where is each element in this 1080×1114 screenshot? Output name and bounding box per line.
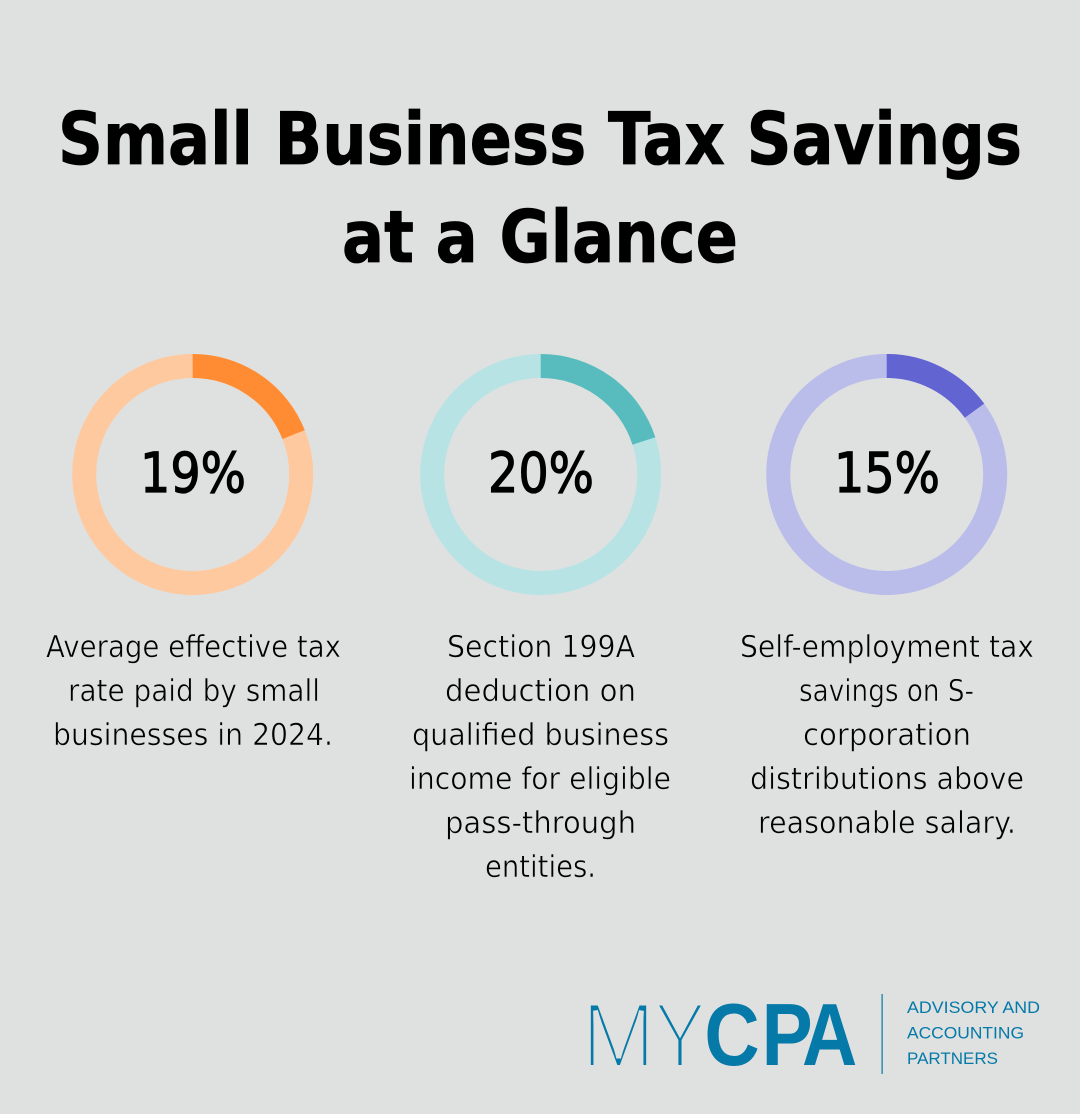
- logo wordmark: [581, 982, 857, 1088]
- logo wordmark: Y: [654, 982, 706, 1088]
- description: 20%: [409, 630, 671, 885]
- description: 20%: qualified business: [412, 718, 669, 753]
- logo: MYCPA: [581, 982, 1040, 1088]
- description: 15%: distributions above: [750, 762, 1024, 797]
- logo tagline: [907, 998, 1040, 1068]
- description: 15%: Self-employment tax: [740, 630, 1034, 665]
- title: at a Glance: [342, 195, 738, 279]
- title: [58, 97, 1022, 279]
- value: 15%: 15%: [834, 441, 940, 505]
- logo tagline: ADVISORY AND: [907, 998, 1040, 1017]
- description: 20%: Section 199A: [447, 630, 635, 665]
- value: 19%: 19%: [140, 441, 246, 505]
- logo wordmark: CPA: [704, 986, 857, 1084]
- description: 15%: reasonable salary.: [758, 806, 1016, 841]
- description: 15%: corporation: [803, 718, 971, 753]
- description: 19%: businesses in 2024.: [53, 718, 333, 753]
- logo tagline: ACCOUNTING: [907, 1024, 1024, 1042]
- logo tagline: PARTNERS: [907, 1049, 998, 1068]
- description: 19%: [46, 630, 341, 753]
- description: 20%: deduction on: [445, 674, 636, 709]
- donut chart: 19%: [84, 366, 301, 583]
- panel: 15% stat: [740, 366, 1034, 841]
- panel: 20% stat: [409, 366, 671, 885]
- description: 15%: [740, 630, 1034, 841]
- value: 20%: 20%: [488, 441, 594, 505]
- description: 20%: pass-through: [445, 806, 636, 841]
- description: 15%: savings on S-: [799, 674, 974, 709]
- description: 20%: entities.: [485, 850, 596, 885]
- panel: 19% stat: [46, 366, 341, 753]
- donut chart: 20%: [432, 366, 649, 583]
- logo wordmark: M: [581, 982, 656, 1088]
- description: 19%: rate paid by small: [68, 674, 320, 709]
- donut chart: 15%: [778, 366, 995, 583]
- description: 20%: income for eligible: [409, 762, 671, 797]
- description: 19%: Average effective tax: [46, 630, 341, 665]
